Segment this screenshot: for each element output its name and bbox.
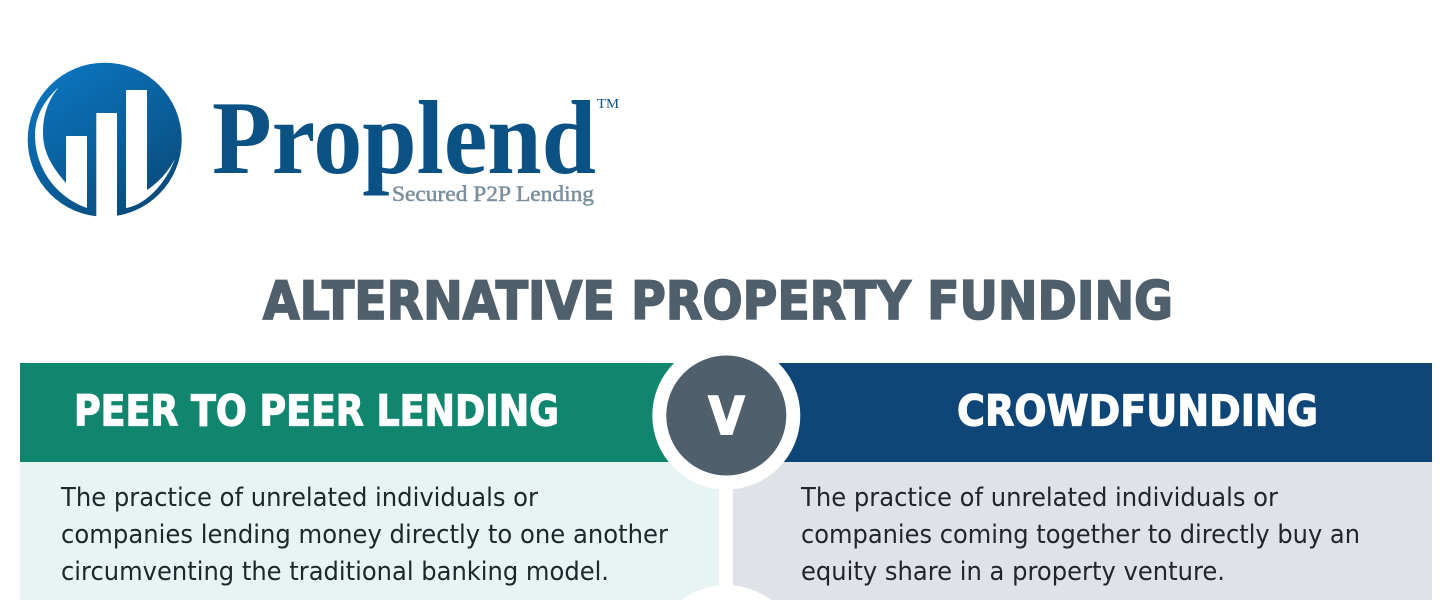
- logo tagline: Secured P2P Lending: [392, 181, 594, 206]
- title: ALTERNATIVE PROPERTY FUNDING: [263, 271, 1173, 332]
- panel: peer to peer lending: [20, 363, 726, 600]
- peer to peer description: circumventing the traditional banking model.: [61, 557, 609, 587]
- peer to peer description: [60, 483, 668, 587]
- crowdfunding description background: [733, 462, 1432, 600]
- crowdfunding description: The practice of unrelated individuals or: [800, 483, 1278, 513]
- crowdfunding description: [800, 483, 1360, 587]
- versus badge: V: [708, 387, 744, 447]
- versus badge: [652, 342, 800, 490]
- crowdfunding description: equity share in a property venture.: [801, 557, 1225, 587]
- icon: circle with rising bars: [28, 63, 182, 219]
- crowdfunding heading: CROWDFUNDING: [957, 386, 1318, 436]
- crowdfunding description: companies coming together to directly buy an: [801, 520, 1360, 550]
- logo: [28, 63, 620, 219]
- logo wordmark: Proplend: [212, 79, 596, 196]
- peer to peer description background: [20, 462, 719, 600]
- peer to peer heading: PEER TO PEER LENDING: [74, 386, 559, 436]
- trademark: TM: [597, 97, 620, 112]
- peer to peer description: companies lending money directly to one another: [61, 520, 668, 550]
- panel: crowdfunding: [726, 363, 1432, 600]
- next badge ring: [682, 585, 771, 600]
- peer to peer description: The practice of unrelated individuals or: [60, 483, 538, 513]
- crowdfunding heading bar: [726, 363, 1432, 462]
- peer to peer heading bar: [20, 363, 726, 462]
